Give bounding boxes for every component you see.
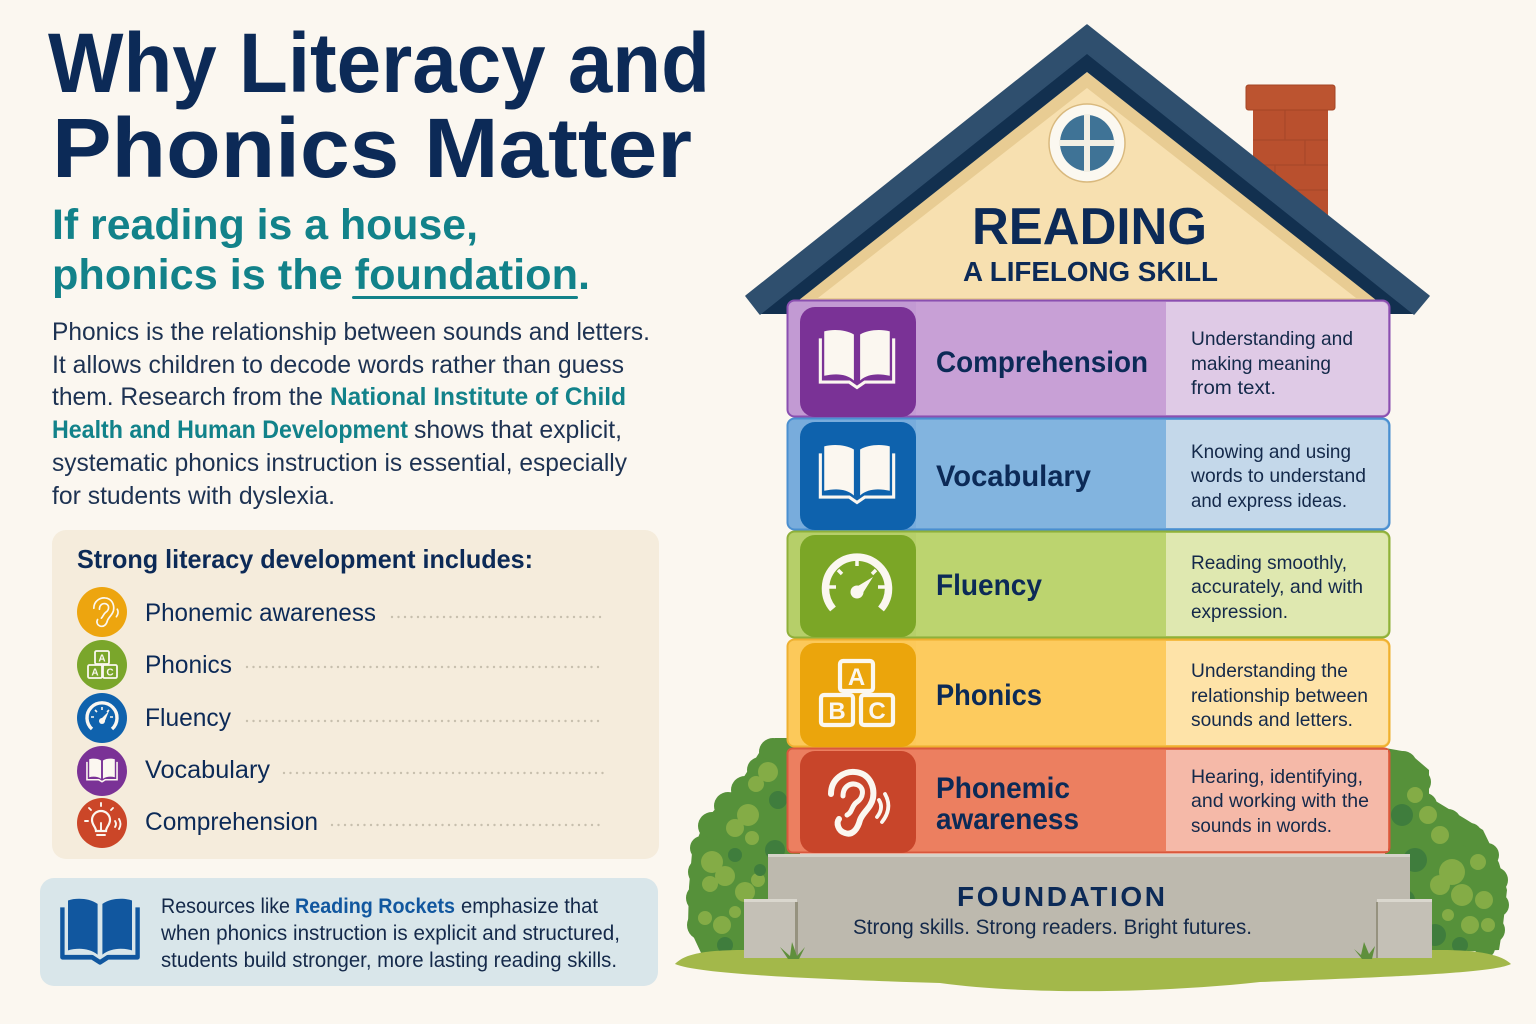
icon: alphabet blocks: A — [848, 664, 865, 691]
title: Why Literacy and — [48, 16, 710, 110]
intro paragraph: Phonics is the relationship between sounds and letters. — [52, 318, 650, 346]
description: and working with the — [1191, 790, 1369, 812]
description — [1191, 660, 1368, 731]
list item: phonemic awareness: Phonemic awareness — [145, 599, 376, 627]
list item: vocabulary: Vocabulary — [145, 756, 270, 784]
intro paragraph: for students with dyslexia. — [52, 482, 335, 510]
foundation: FOUNDATION — [957, 881, 1165, 912]
icon: open book — [800, 422, 916, 530]
list item: fluency: Fluency — [145, 704, 231, 732]
subtitle — [52, 201, 590, 299]
panel heading: Strong literacy development includes: — [77, 544, 533, 574]
left bush — [686, 738, 800, 957]
description: Reading smoothly, — [1191, 552, 1347, 574]
right bush — [1385, 748, 1509, 958]
title — [48, 16, 710, 195]
description: from text. — [1191, 377, 1276, 399]
list item: phonics — [77, 640, 603, 690]
description: accurately, and with — [1191, 576, 1363, 598]
icon: alphabet blocks — [800, 643, 916, 747]
roof heading — [963, 198, 1218, 287]
title: Phonics Matter — [52, 101, 692, 195]
intro paragraph: systematic phonics instruction is essential, especially — [52, 449, 627, 477]
layer: comprehension — [788, 300, 1390, 417]
callout text: Resources like — [161, 895, 290, 918]
foundation side blocks — [744, 899, 1432, 958]
layer: comprehension: Comprehension — [936, 346, 1148, 379]
list item: comprehension — [77, 798, 603, 848]
description: sounds in words. — [1191, 815, 1332, 837]
callout text: when phonics instruction is explicit and structured, — [160, 922, 620, 945]
description — [1190, 441, 1366, 512]
roof heading: A LIFELONG SKILL — [963, 256, 1218, 287]
intro paragraph: Health and Human Development — [52, 416, 409, 444]
description — [1191, 552, 1363, 623]
list item: vocabulary — [77, 746, 603, 796]
intro paragraph: National Institute of Child — [330, 383, 626, 411]
layer: fluency: Fluency — [936, 569, 1042, 602]
layer: phonemic awareness: awareness — [936, 803, 1079, 836]
foundation — [744, 854, 1432, 959]
list item: comprehension: Comprehension — [145, 808, 318, 836]
list item: phonics: A — [98, 654, 106, 664]
layer: phonemic awareness — [788, 748, 1390, 853]
grass — [675, 950, 1511, 991]
foundation: Strong skills. Strong readers. Bright futures. — [853, 916, 1252, 939]
description: expression. — [1191, 601, 1288, 623]
intro paragraph — [52, 318, 650, 510]
bushes — [686, 738, 1509, 958]
roof heading: READING — [972, 198, 1207, 256]
description: Hearing, identifying, — [1191, 766, 1363, 788]
icon: alphabet blocks: C — [868, 698, 886, 725]
description: Understanding and — [1191, 328, 1353, 350]
list item: phonemic awareness — [77, 587, 603, 637]
callout text: Reading Rockets — [295, 895, 455, 918]
layer: vocabulary: Vocabulary — [936, 460, 1091, 493]
callout text — [160, 895, 620, 972]
intro paragraph: shows that explicit, — [414, 416, 622, 444]
subtitle: If reading is a house, — [52, 201, 478, 249]
description: Understanding the — [1191, 660, 1348, 682]
icon: ear — [800, 751, 916, 853]
layer: phonics: Phonics — [936, 679, 1042, 712]
description: relationship between — [1191, 685, 1368, 707]
list item: phonics: Phonics — [145, 651, 232, 679]
description: making meaning — [1191, 353, 1331, 375]
list item: phonics: C — [106, 668, 114, 678]
layer: vocabulary — [788, 418, 1390, 530]
description: and express ideas. — [1191, 490, 1347, 512]
callout text: students build stronger, more lasting reading skills. — [161, 949, 617, 972]
intro paragraph: them. Research from the — [52, 383, 323, 411]
layer: phonics — [788, 640, 1390, 747]
description — [1191, 328, 1353, 399]
layer: fluency — [788, 532, 1390, 638]
callout: reading rockets — [40, 878, 658, 986]
roof and gable — [746, 25, 1429, 314]
list item: fluency — [77, 693, 603, 743]
callout text: emphasize that — [461, 895, 598, 918]
description: Knowing and using — [1191, 441, 1351, 463]
description: sounds and letters. — [1191, 709, 1353, 731]
icon: gauge — [800, 535, 916, 637]
layer: phonemic awareness: Phonemic — [936, 772, 1070, 805]
description — [1191, 766, 1369, 837]
chimney — [1246, 85, 1335, 230]
panel: strong literacy development — [52, 530, 659, 859]
description: words to understand — [1190, 465, 1366, 487]
icon: alphabet blocks: B — [828, 698, 846, 725]
icon: open book — [800, 307, 916, 417]
intro paragraph: It allows children to decode words rather than guess — [52, 351, 624, 379]
round window — [1049, 104, 1125, 182]
list item: phonics: A — [91, 668, 99, 678]
subtitle: phonics is the foundation. — [52, 251, 590, 299]
icon: book — [62, 899, 138, 962]
